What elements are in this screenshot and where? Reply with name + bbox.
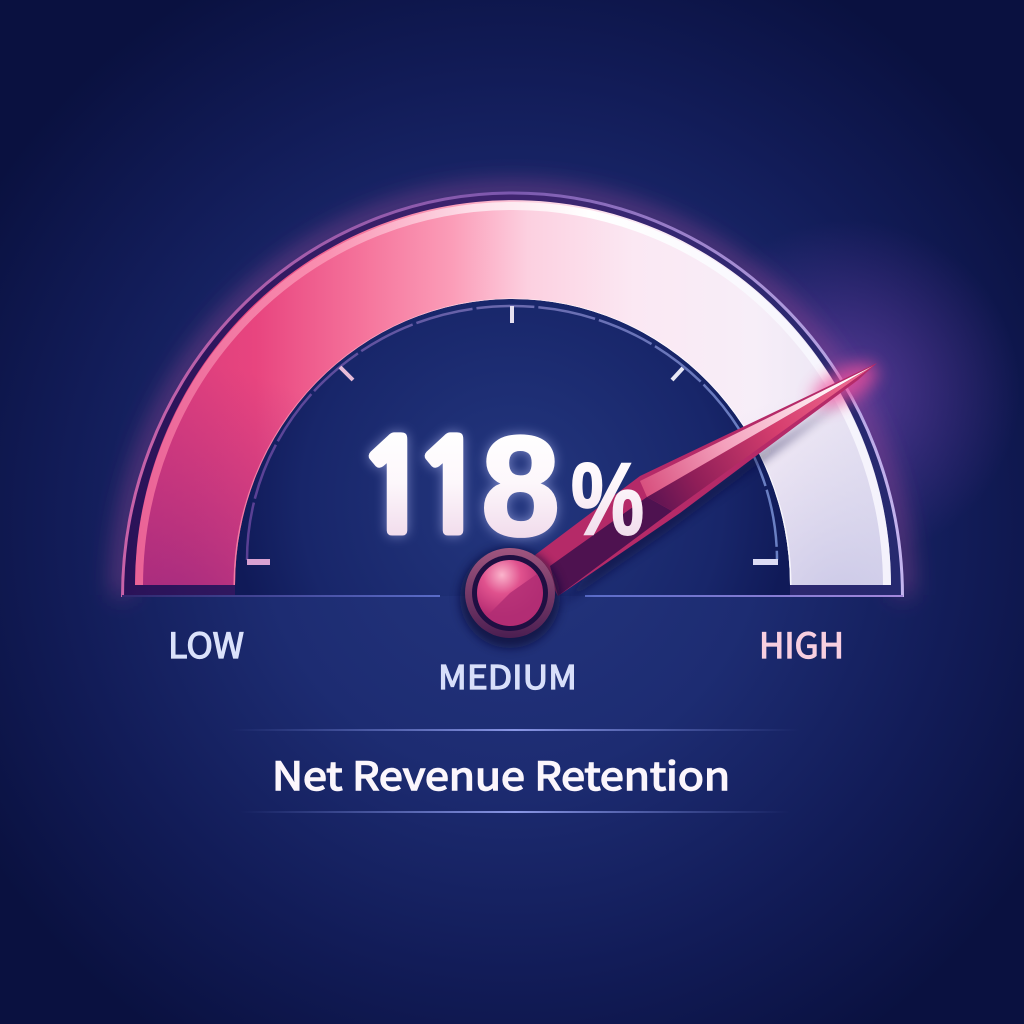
gauge inner disc <box>235 299 790 596</box>
value glow: 11 <box>356 426 488 550</box>
needle shadow <box>560 395 850 606</box>
arc shading <box>130 190 900 590</box>
inner scale arc <box>247 306 777 560</box>
divider top <box>230 729 800 731</box>
value digits: 11 <box>356 426 488 550</box>
gauge outer glow <box>122 192 903 595</box>
baseline left <box>122 595 440 597</box>
divider bottom <box>240 811 790 813</box>
needle hub <box>460 548 560 648</box>
value: 118% <box>356 407 644 566</box>
baseline right <box>585 595 903 597</box>
value digits: 8 <box>481 407 560 566</box>
needle tip glow <box>806 354 884 416</box>
title: Net Revenue Retention <box>272 746 730 802</box>
label: MEDIUM: MEDIUM <box>438 651 577 699</box>
label: HIGH: HIGH <box>759 618 844 669</box>
value percent sign: % <box>571 442 644 556</box>
needle dark lower shank <box>550 497 672 596</box>
needle <box>535 354 884 606</box>
gauge coloured arc <box>135 200 891 585</box>
gauge outer rim <box>122 193 902 597</box>
gauge <box>122 190 903 597</box>
gauge dark band <box>122 193 903 596</box>
needle lower facet <box>647 368 870 511</box>
value glow: 8 <box>481 407 560 566</box>
needle upper facet <box>640 366 873 497</box>
label: LOW: LOW <box>168 618 244 669</box>
needle body <box>535 363 877 596</box>
tick marks <box>247 306 778 562</box>
